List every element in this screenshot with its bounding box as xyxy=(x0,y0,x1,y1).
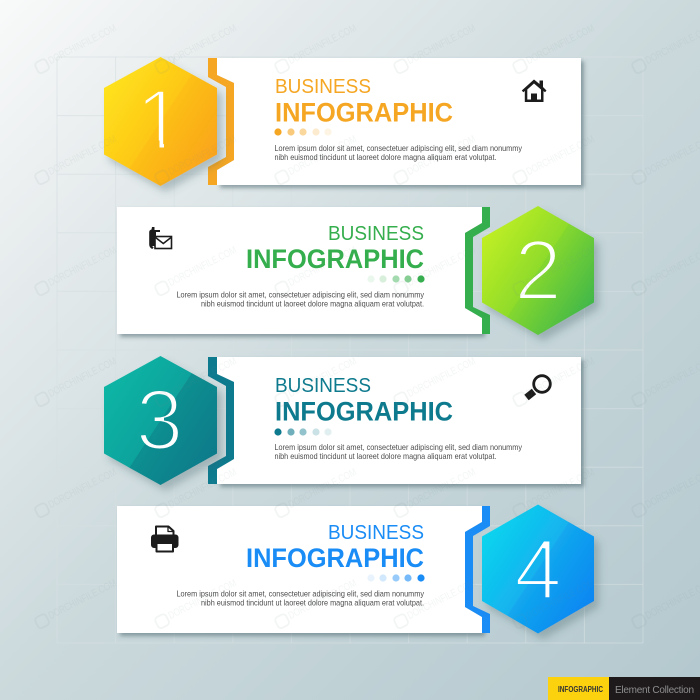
panel 1 body text: nibh euismod tincidunt ut laoreet dolore magna aliquam erat volutpat. xyxy=(274,152,496,162)
panel 4 body text: nibh euismod tincidunt ut laoreet dolore magna aliquam erat volutpat. xyxy=(201,598,424,608)
footer tab xyxy=(548,677,700,700)
panel 1 body text: Lorem ipsum dolor sit amet, consectetuer adipiscing elit, sed diam nonummy xyxy=(274,143,523,153)
panel 3 hexagon: 3 xyxy=(136,373,183,468)
panel 4 body text: Lorem ipsum dolor sit amet, consectetuer adipiscing elit, sed diam nonummy xyxy=(176,588,425,598)
watermark: DORCHINFILE.COM xyxy=(524,355,596,399)
watermark: DORCHINFILE.COM xyxy=(46,355,118,399)
panel 1 bracket xyxy=(208,58,234,185)
panel 1 heading: BUSINESS xyxy=(275,75,371,98)
panel 4 heading xyxy=(246,521,424,573)
panel 2 heading: INFOGRAPHIC xyxy=(246,244,424,274)
panel 2 heading xyxy=(246,222,424,274)
icon: printer xyxy=(152,526,178,552)
panel 2 heading: BUSINESS xyxy=(328,222,424,245)
watermark: DORCHINFILE.COM xyxy=(46,244,118,288)
watermark: DORCHINFILE.COM xyxy=(286,244,358,288)
watermark: DORCHINFILE.COM xyxy=(166,22,238,66)
panel 4 heading: BUSINESS xyxy=(328,521,424,544)
panel 3 bracket xyxy=(208,357,234,484)
panel 4 card xyxy=(117,506,482,633)
panel 3 body text: Lorem ipsum dolor sit amet, consectetuer adipiscing elit, sed diam nonummy xyxy=(274,442,523,452)
watermark: DORCHINFILE.COM xyxy=(524,133,596,177)
watermark: DORCHINFILE.COM xyxy=(405,244,477,288)
watermark: DORCHINFILE.COM xyxy=(166,577,238,621)
panel 3: teal xyxy=(104,356,581,485)
watermark: DORCHINFILE.COM xyxy=(286,133,358,177)
panel 4 dots xyxy=(367,574,425,582)
watermark: DORCHINFILE.COM xyxy=(166,133,238,177)
footer tab: INFOGRAPHIC xyxy=(558,685,603,694)
watermark: DORCHINFILE.COM xyxy=(286,355,358,399)
panel 2 hexagon: 2 xyxy=(514,224,562,318)
panel 1 dots xyxy=(274,128,332,136)
footer tab: Element Collection xyxy=(615,685,694,696)
watermark: DORCHINFILE.COM xyxy=(46,466,118,510)
panel 3 card xyxy=(217,357,581,484)
watermark: DORCHINFILE.COM xyxy=(405,355,477,399)
panel 2 body text: Lorem ipsum dolor sit amet, consectetuer adipiscing elit, sed diam nonummy xyxy=(176,290,425,300)
icon: home xyxy=(522,80,546,102)
panel 3 body text: nibh euismod tincidunt ut laoreet dolore magna aliquam erat volutpat. xyxy=(274,451,496,461)
panel 1 heading: INFOGRAPHIC xyxy=(275,98,453,128)
watermark: DORCHINFILE.COM xyxy=(46,22,118,66)
watermark: DORCHINFILE.COM xyxy=(524,22,596,66)
watermark: DORCHINFILE.COM xyxy=(405,22,477,66)
panel 2 card xyxy=(117,207,482,334)
panel 1 card xyxy=(217,58,581,185)
icon: magnifier xyxy=(526,376,550,398)
panel 4 hexagon xyxy=(482,504,594,634)
watermark: DORCHINFILE.COM xyxy=(166,466,238,510)
panel 3 heading xyxy=(275,374,453,426)
icon: phone and mail xyxy=(149,227,172,249)
watermark: DORCHINFILE.COM xyxy=(286,466,358,510)
panel 3 heading: INFOGRAPHIC xyxy=(275,396,453,426)
watermark: DORCHINFILE.COM xyxy=(286,577,358,621)
watermark: DORCHINFILE.COM xyxy=(405,577,477,621)
panel 1 hexagon: 1 xyxy=(136,73,183,168)
watermark: DORCHINFILE.COM xyxy=(286,22,358,66)
watermark: DORCHINFILE.COM xyxy=(524,244,596,288)
panel 2 dots xyxy=(367,275,425,283)
watermark: DORCHINFILE.COM xyxy=(524,466,596,510)
panel 4 body text xyxy=(176,588,425,608)
background grid xyxy=(57,57,643,643)
panel 3 heading: BUSINESS xyxy=(275,374,371,397)
watermark: DORCHINFILE.COM xyxy=(524,577,596,621)
panel 1 heading xyxy=(275,75,453,128)
watermark: DORCHINFILE.COM xyxy=(405,133,477,177)
panel 1: orange xyxy=(104,57,581,186)
watermark: DORCHINFILE.COM xyxy=(405,466,477,510)
watermark: DORCHINFILE.COM xyxy=(46,133,118,177)
watermark: DORCHINFILE.COM xyxy=(46,577,118,621)
panel 4 bracket xyxy=(465,506,490,633)
panel 1 hexagon xyxy=(104,57,217,186)
watermark: DORCHINFILE.COM xyxy=(166,244,238,288)
watermark: DORCHINFILE.COM xyxy=(166,355,238,399)
panel 3 hexagon xyxy=(104,356,217,485)
panel 4 heading: INFOGRAPHIC xyxy=(246,543,424,573)
panel 2 bracket xyxy=(465,207,490,334)
panel 2 body text xyxy=(176,290,425,308)
panel 2 hexagon xyxy=(482,206,594,335)
panel 3 dots xyxy=(274,428,332,436)
panel 1 body text xyxy=(274,143,523,162)
panel 2: green xyxy=(117,206,594,335)
panel 2 body text: nibh euismod tincidunt ut laoreet dolore magna aliquam erat volutpat. xyxy=(201,298,424,308)
panel 4 hexagon: 4 xyxy=(514,523,562,618)
panel 4: blue xyxy=(117,504,594,634)
panel 3 body text xyxy=(274,442,523,461)
